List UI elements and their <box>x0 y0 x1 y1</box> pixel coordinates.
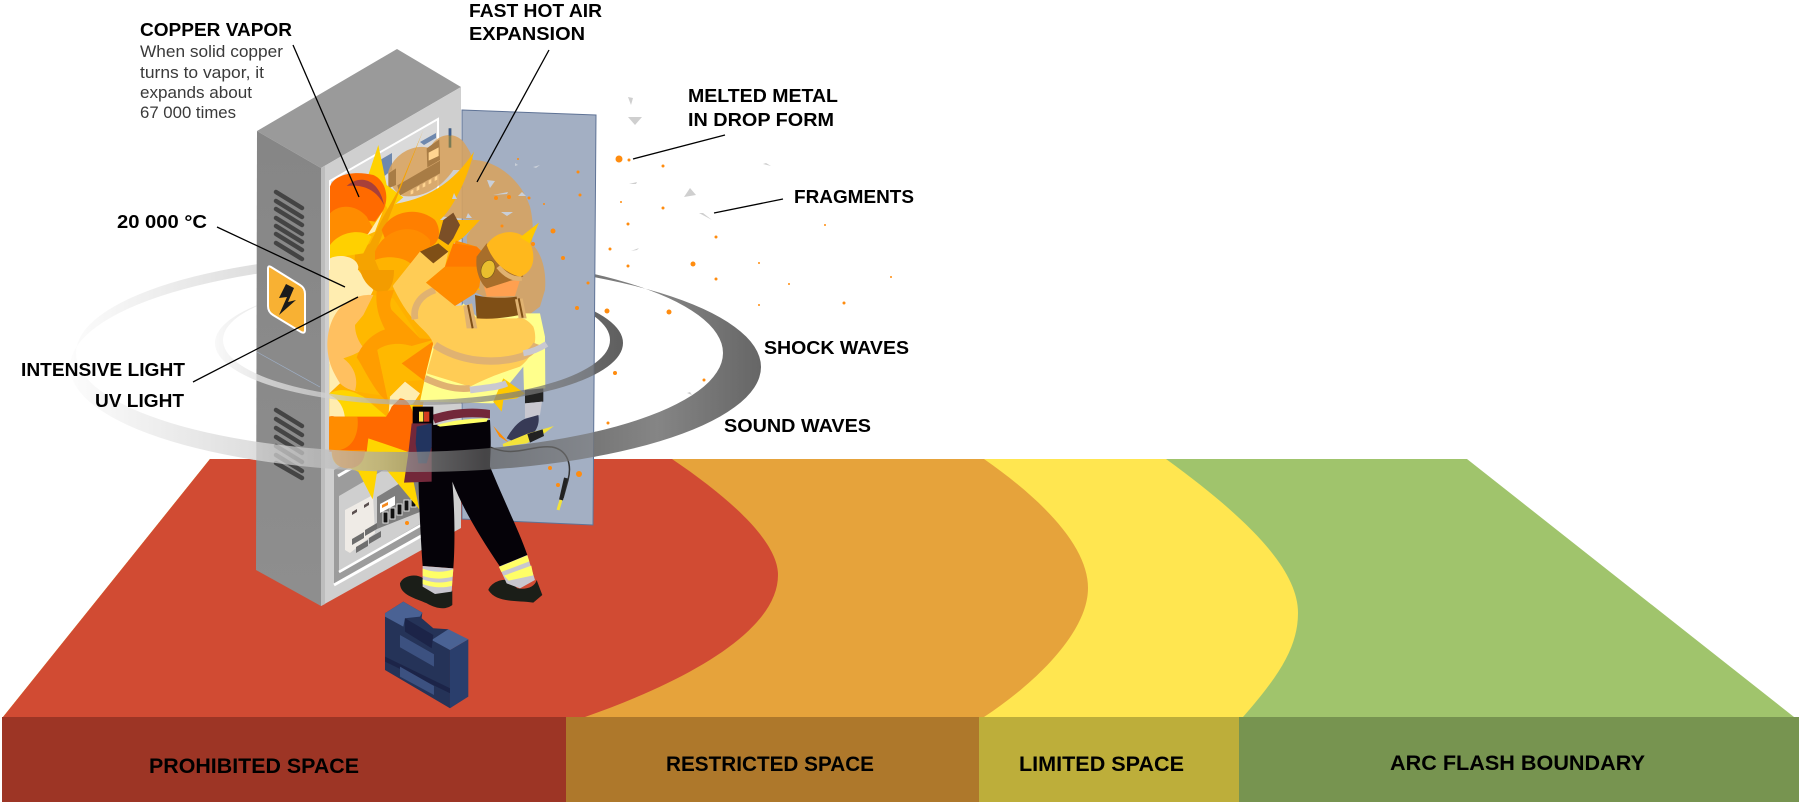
zone: limited space floor <box>3 459 1298 717</box>
legend: limited space: LIMITED SPACE <box>1019 753 1184 776</box>
orange shard <box>493 426 509 443</box>
right boot cuff <box>499 555 535 588</box>
yellow spike <box>368 145 403 210</box>
legend: prohibited space <box>2 717 566 802</box>
callout: intensive light and UV light: UV LIGHT <box>95 391 184 411</box>
glove <box>507 415 539 441</box>
floor zones <box>3 459 1794 717</box>
pouch <box>404 423 432 483</box>
neck <box>483 280 520 297</box>
legend: prohibited space: PROHIBITED SPACE <box>149 755 359 778</box>
zone: restricted space floor <box>3 459 1088 717</box>
sound wave ring, back <box>70 254 761 472</box>
legend: restricted space <box>566 717 979 802</box>
hot air cloud <box>388 128 545 317</box>
firefighter <box>393 213 569 608</box>
orange patch <box>426 241 484 306</box>
burst <box>330 152 480 290</box>
breaker panel <box>334 412 433 585</box>
swirl <box>357 290 435 402</box>
fireball upper <box>330 130 480 290</box>
callout: fragments: FRAGMENTS <box>794 187 914 207</box>
raised arm <box>393 252 448 285</box>
upper body <box>393 252 554 447</box>
lower flame layers <box>329 390 413 450</box>
cabinet components seen through cloud <box>388 128 451 195</box>
callout: melted metal <box>633 86 838 159</box>
upper window <box>330 119 438 362</box>
goggles <box>479 258 497 280</box>
callout: intensive light and UV light <box>21 297 358 411</box>
zone: arc flash boundary floor <box>3 459 1794 717</box>
callout: copper vapor <box>140 20 359 197</box>
callout: fragments <box>714 187 914 213</box>
cream glow <box>329 270 373 393</box>
toolbox handle <box>405 618 433 648</box>
callout: 20 000 C: 20 000 °C <box>117 212 207 232</box>
head <box>476 223 539 288</box>
molten drops <box>405 156 892 525</box>
label: shock waves: SHOCK WAVES <box>764 338 909 358</box>
callout: fast hot air expansion: EXPANSION <box>469 24 585 44</box>
icon: upper vent <box>276 192 302 259</box>
fragments <box>452 97 771 395</box>
cabinet front <box>321 87 461 606</box>
toolbox top band <box>385 602 422 627</box>
zone: prohibited space floor <box>3 459 778 717</box>
callout: copper vapor: When solid copper <box>140 43 284 61</box>
legend: arc flash boundary: ARC FLASH BOUNDARY <box>1390 752 1645 775</box>
icon: lower vent <box>276 410 302 478</box>
callout: melted metal: IN DROP FORM <box>688 110 834 130</box>
helmet <box>487 232 533 277</box>
trousers <box>415 420 535 594</box>
cabinet top <box>257 49 461 168</box>
left boot cuff <box>423 566 453 594</box>
shock wave ring, front <box>256 362 596 405</box>
shock wave ring, back <box>215 280 623 405</box>
callout: copper vapor: turns to vapor, it <box>140 64 264 82</box>
voltage tester <box>503 426 554 447</box>
icon: toolbox <box>385 602 468 708</box>
callout: 20 000 C <box>117 212 345 287</box>
tester wire and probe <box>490 447 569 510</box>
jacket base <box>420 303 545 403</box>
cabinet side <box>256 131 321 606</box>
legend: limited space <box>979 717 1239 802</box>
copper vapor blob <box>330 173 386 222</box>
callout: copper vapor: 67 000 times <box>140 104 236 122</box>
collar <box>475 295 519 319</box>
callout: melted metal: MELTED METAL <box>688 86 838 106</box>
toolbox end <box>450 639 468 708</box>
legend: arc flash boundary <box>1239 717 1799 802</box>
orange sleeve patch and arm <box>393 213 484 306</box>
toolbox front <box>385 602 450 708</box>
callout: copper vapor: expands about <box>140 84 252 102</box>
toolbox lid corner <box>432 629 468 650</box>
fireball lower <box>327 270 435 450</box>
label: sound waves: SOUND WAVES <box>724 416 871 436</box>
legend: restricted space: RESTRICTED SPACE <box>666 753 874 776</box>
reflective stripes <box>415 290 547 390</box>
belt <box>437 418 488 427</box>
open cabinet door <box>462 110 596 525</box>
spark behind jacket <box>493 378 525 412</box>
callout: copper vapor: COPPER VAPOR <box>140 20 292 40</box>
fireball base and spikes <box>329 417 419 509</box>
electrical cabinet <box>256 49 461 606</box>
callout: intensive light and UV light: INTENSIVE LIGHT <box>21 360 185 380</box>
sound wave ring, front <box>255 432 596 472</box>
cuff <box>420 243 448 263</box>
boots <box>400 575 542 608</box>
translucent blob <box>327 295 417 392</box>
legend bar <box>2 717 1799 802</box>
icon: hazard sign <box>268 266 305 333</box>
jacket gold overlay <box>393 252 535 387</box>
hand <box>438 213 460 245</box>
callout: fast hot air expansion <box>469 1 602 182</box>
right sleeve cuff and wrist <box>525 388 543 403</box>
callout: fast hot air expansion: FAST HOT AIR <box>469 1 602 21</box>
